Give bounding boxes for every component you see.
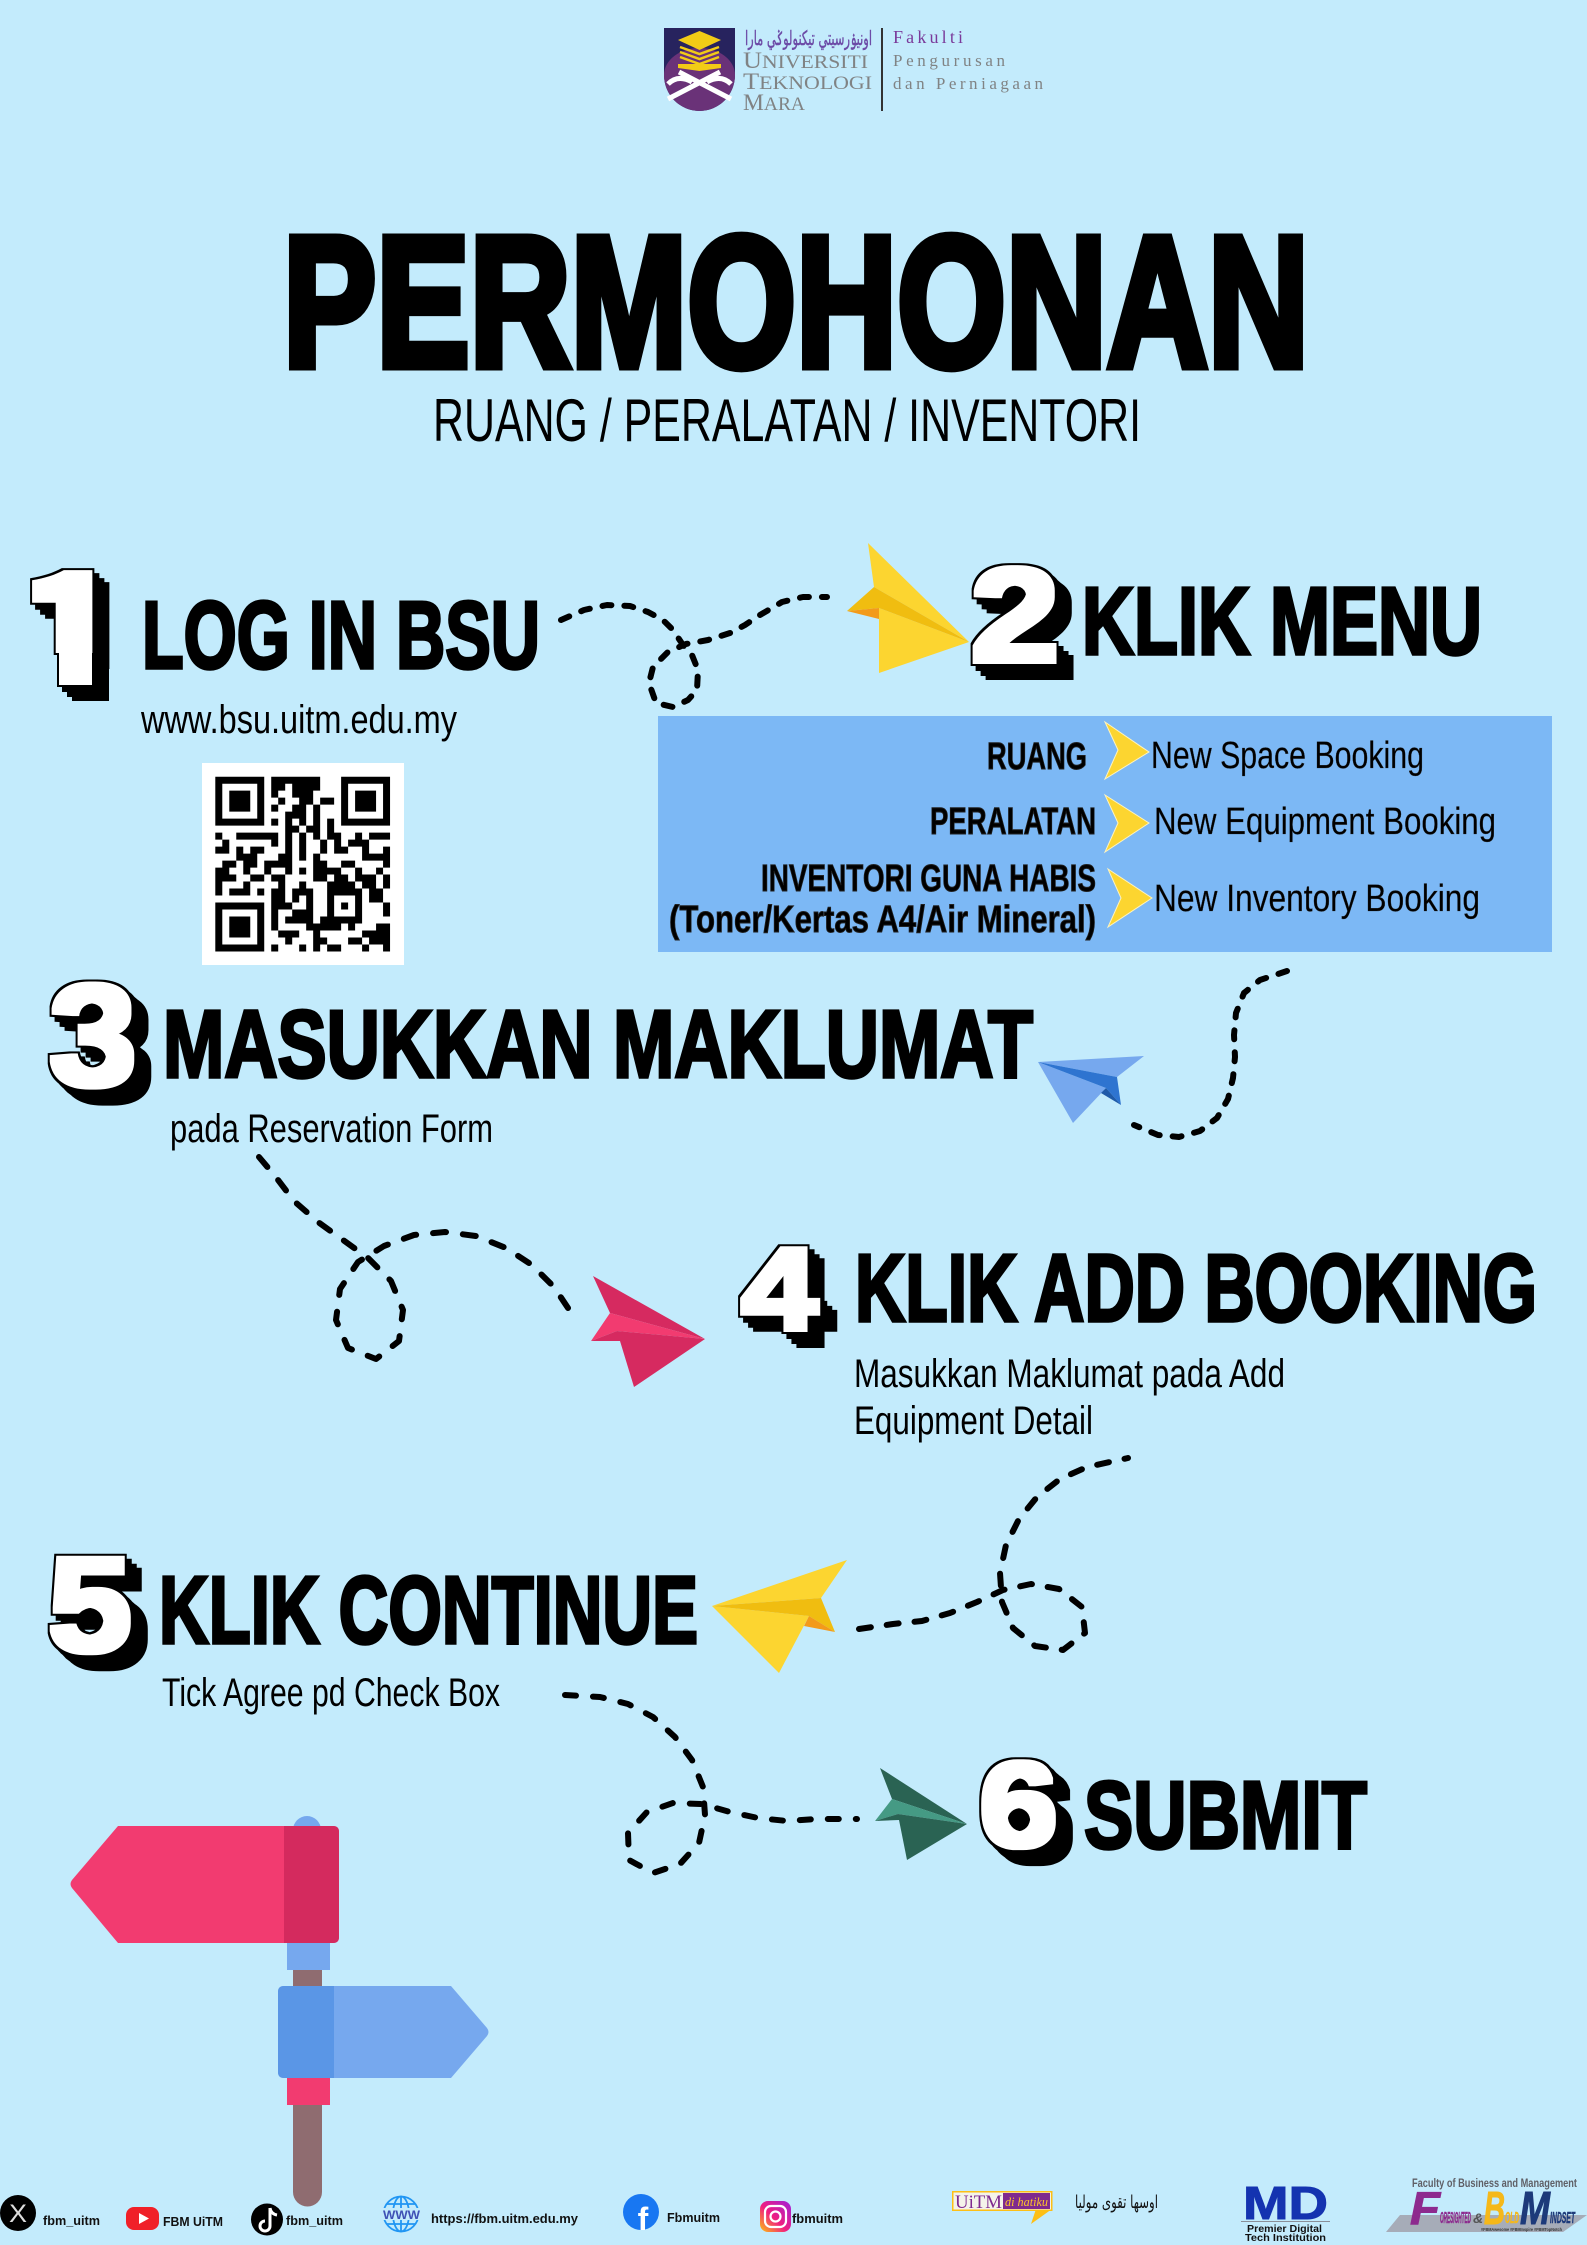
url: www.bsu.uitm.edu.my <box>140 698 457 742</box>
faculty name: dan Perniagaan <box>893 74 1044 93</box>
university name: MARA <box>743 90 805 115</box>
dashed path: step 4 to 5 <box>859 1458 1128 1650</box>
logo: foresighted and bold mindset: F <box>1410 2182 1442 2234</box>
X account: X <box>9 2200 27 2228</box>
logo: UiTM di hatiku: UiTM <box>955 2192 1002 2213</box>
X account: fbm_uitm <box>43 2213 100 2228</box>
QR code <box>202 763 404 965</box>
logo: foresighted and bold mindset: #FBMAwesome #FBMInspire #FBMTopNotch <box>1481 2227 1562 2232</box>
row: peralatan <box>930 795 1496 852</box>
note: add equipment detail: Masukkan Maklumat pada Add <box>854 1352 1285 1396</box>
logo: UiTM di hatiku <box>952 2191 1052 2224</box>
YouTube account: FBM UiTM <box>163 2214 223 2229</box>
row: inventori: New Inventory Booking <box>1154 878 1480 920</box>
website: WWW <box>383 2208 421 2222</box>
icon: UiTM shield <box>664 28 735 111</box>
logo: MD premier digital: Premier Digital <box>1247 2224 1322 2235</box>
faculty name <box>893 27 1044 93</box>
footer: partner logos <box>952 2176 1587 2244</box>
panel: menu options <box>658 716 1552 952</box>
step 6 <box>979 1738 1367 1872</box>
TikTok account <box>251 2204 343 2236</box>
dashed path: step 2 to 3 <box>1134 971 1287 1137</box>
icon: signpost <box>70 1816 488 2206</box>
Facebook account: Fbmuitm <box>667 2210 720 2225</box>
logo: UiTM di hatiku: di hatiku <box>1005 2194 1048 2209</box>
logo: foresighted and bold mindset: OLD <box>1505 2210 1519 2227</box>
number 6: 6 <box>979 1738 1058 1872</box>
logo: foresighted and bold mindset: & <box>1473 2210 1483 2226</box>
step 4 <box>741 1224 1537 1443</box>
website <box>382 2196 579 2232</box>
row: peralatan: New Equipment Booking <box>1154 801 1496 843</box>
step 5 <box>48 1531 698 1715</box>
row: ruang: New Space Booking <box>1151 735 1424 777</box>
logo: MD premier digital <box>1241 2177 1330 2244</box>
faculty name: Pengurusan <box>893 51 1006 70</box>
Instagram account: fbmuitm <box>792 2211 843 2226</box>
faculty name: Fakulti <box>893 27 963 47</box>
subtitle: RUANG / PERALATAN / INVENTORI <box>433 387 1141 454</box>
footer: social links <box>0 2194 843 2237</box>
motto in jawi: اوسها تقوى موليا <box>1075 2192 1158 2213</box>
YouTube account <box>126 2207 223 2230</box>
website: https://fbm.uitm.edu.my <box>431 2211 579 2226</box>
heading: log in: LOG IN BSU <box>142 582 540 689</box>
row: inventori: (Toner/Kertas A4/Air Mineral) <box>669 899 1096 941</box>
number 1: 1 <box>18 509 123 726</box>
heading: submit: SUBMIT <box>1084 1762 1367 1869</box>
icon: yellow paper plane 1 <box>847 543 969 673</box>
dashed path: step 3 to 4 <box>259 1157 576 1359</box>
note: add equipment detail <box>854 1352 1285 1443</box>
logo: foresighted and bold mindset: M <box>1520 2182 1551 2234</box>
heading: masukkan maklumat: MASUKKAN MAKLUMAT <box>163 991 1033 1098</box>
X account <box>0 2195 100 2231</box>
row: inventori: INVENTORI GUNA HABIS <box>761 858 1096 900</box>
university name <box>743 48 872 115</box>
step 3 <box>49 955 1033 1151</box>
note: add equipment detail: Equipment Detail <box>854 1399 1093 1443</box>
university name: UNIVERSITI <box>743 48 868 73</box>
Facebook account: f <box>638 2201 649 2237</box>
number 3: 3 <box>49 955 137 1116</box>
number 4: 4 <box>741 1224 818 1354</box>
university name in jawi: اونيۏرسيتي تيكنولوݢي مارا <box>745 26 872 51</box>
number 5: 5 <box>48 1531 132 1680</box>
row: inventori <box>669 858 1480 941</box>
Facebook account <box>623 2194 720 2237</box>
row: ruang: RUANG <box>987 736 1087 778</box>
icon: green paper plane <box>875 1768 967 1860</box>
TikTok account: fbm_uitm <box>286 2213 343 2228</box>
Instagram account <box>760 2201 843 2232</box>
number 2: 2 <box>970 542 1060 690</box>
logo: UiTM Fakulti Pengurusan dan Perniagaan <box>664 26 1044 115</box>
row: ruang <box>987 722 1424 779</box>
icon: blue paper plane <box>1038 1056 1144 1123</box>
dashed path: step 5 to 6 <box>565 1695 857 1873</box>
logo: MD premier digital: Tech Institution <box>1245 2233 1326 2244</box>
logo: foresighted and bold mindset <box>1386 2176 1587 2234</box>
note: tick agree: Tick Agree pd Check Box <box>162 1671 500 1715</box>
logo: MD premier digital: MD <box>1243 2177 1328 2229</box>
icon: red paper plane <box>591 1276 705 1387</box>
dashed path: step 1 to 2 <box>561 597 827 707</box>
logo: foresighted and bold mindset: B <box>1484 2182 1505 2234</box>
logo: foresighted and bold mindset: ORESIGHTED <box>1440 2210 1471 2227</box>
note: reservation form: pada Reservation Form <box>170 1107 493 1151</box>
icon: yellow paper plane 2 <box>712 1560 847 1673</box>
university name: TEKNOLOGI <box>743 69 872 94</box>
step 1 <box>18 509 540 965</box>
heading: klik continue: KLIK CONTINUE <box>159 1557 698 1664</box>
row: peralatan: PERALATAN <box>930 801 1096 843</box>
step 2 <box>970 542 1482 690</box>
